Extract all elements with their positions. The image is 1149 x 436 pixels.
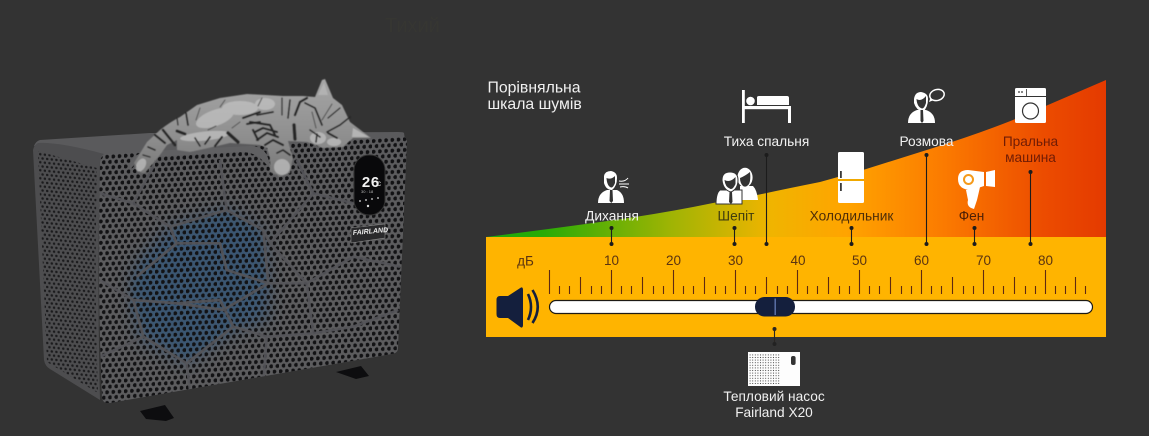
decibel scale numbers: 30 [728, 253, 743, 268]
decibel ruler ticks [550, 270, 1086, 294]
label: washing machine: Пральна [1003, 134, 1059, 149]
infographic canvas [33, 78, 1106, 421]
leader: hair dryer [972, 226, 976, 246]
leader: washing machine [1028, 170, 1032, 246]
icon: breathing person [598, 171, 629, 203]
marker: whisper [716, 168, 758, 246]
label: heat pump model: Fairland X20 [735, 405, 813, 420]
decibel band [486, 237, 1106, 337]
leader: conversation [924, 153, 928, 246]
heat pump pointer [772, 327, 776, 346]
decibel scale numbers: 40 [790, 253, 806, 268]
brand logo badge: FAIRLAND [353, 227, 388, 237]
unit side panel [33, 143, 104, 400]
decibel scale numbers [517, 253, 1053, 268]
hexagon strips [100, 160, 400, 390]
label: conversation: Розмова [899, 134, 954, 149]
leader: breathing [610, 226, 614, 246]
icon: two people whispering [716, 168, 758, 204]
decibel scale numbers: 50 [852, 253, 867, 268]
cat lighter fur patches [134, 83, 369, 175]
unit front panel [98, 137, 407, 403]
marker: refrigerator [810, 152, 894, 246]
icon: person talking [908, 88, 945, 123]
icon: refrigerator [838, 152, 864, 203]
control panel display: 26 [362, 175, 380, 192]
leader: refrigerator [850, 226, 854, 246]
decibel scale numbers: 20 [666, 253, 681, 268]
decibel scale numbers: 70 [976, 253, 991, 268]
brand logo badge [351, 224, 388, 243]
noise level wedge [486, 80, 1106, 238]
marker: conversation [899, 88, 954, 246]
label: breathing: Дихання [585, 208, 639, 224]
control panel display [354, 155, 385, 215]
product: Fairland heat pump with cat [33, 79, 415, 421]
decibel scale numbers: 80 [1038, 253, 1053, 268]
icon: bed [742, 90, 791, 123]
label: heat pump model: Тепловий насос [723, 389, 825, 404]
icon: speaker [496, 287, 538, 328]
handle recess [130, 146, 272, 170]
label: whisper: Шепіт [718, 208, 755, 224]
label: quiet bedroom: Тиха спальня [724, 134, 809, 149]
slider knob at heat pump level [755, 297, 795, 316]
faint ghost caption at top: Тихий [385, 15, 440, 37]
marker: breathing [585, 171, 639, 246]
decibel scale numbers: 10 [604, 253, 619, 268]
marker: hair dryer [958, 170, 995, 246]
cat stripes [143, 98, 350, 157]
heading: noise scale title: шкала шумів [488, 96, 582, 113]
icon: washing machine [1015, 88, 1046, 123]
control panel display: 30 : 18 [361, 189, 374, 194]
control panel display: c [377, 179, 381, 188]
decibel scale numbers: 60 [914, 253, 929, 268]
sleeping cat [134, 79, 371, 177]
unit feet [140, 366, 369, 421]
marker: washing machine [1003, 88, 1059, 246]
unit top surface [34, 132, 405, 160]
icon: hair dryer [958, 170, 995, 209]
slider track [550, 300, 1092, 314]
heading: noise scale title: Порівняльна [488, 80, 581, 96]
blue fan glow [130, 210, 268, 362]
decibel scale numbers: дБ [517, 254, 534, 268]
label: hair dryer: Фен [959, 208, 984, 224]
leader: whisper [732, 226, 736, 246]
label: washing machine: машина [1005, 150, 1056, 165]
marker: quiet bedroom [724, 90, 809, 246]
icon: heat pump thumbnail [748, 352, 800, 386]
label: refrigerator: Холодильник [810, 208, 894, 224]
leader: quiet bedroom [764, 153, 768, 246]
